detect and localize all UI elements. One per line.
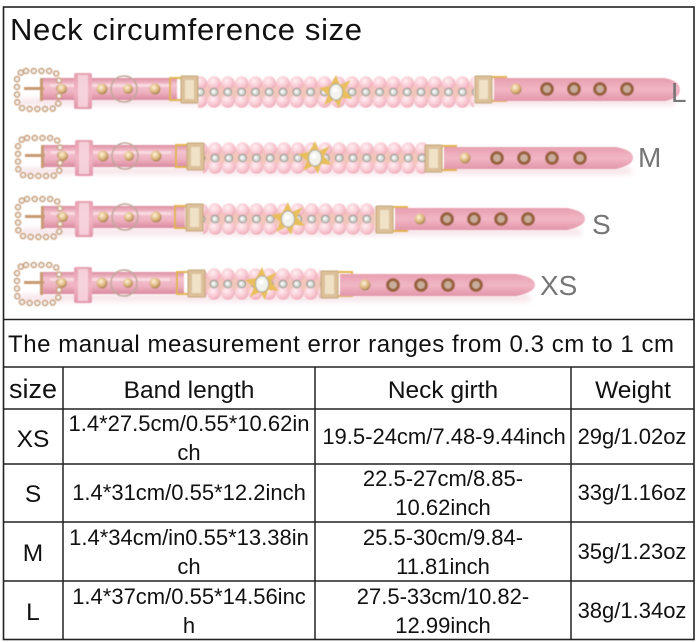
- size label S: S: [592, 209, 611, 240]
- row M: [23, 525, 686, 579]
- row M: ch: [177, 554, 201, 579]
- row M: 25.5-30cm/9.84-: [363, 525, 523, 550]
- row S: 1.4*31cm/0.55*12.2inch: [72, 480, 306, 505]
- row XS: 29g/1.02oz: [578, 424, 686, 449]
- row XS: ch: [177, 440, 201, 465]
- row M: 35g/1.23oz: [578, 539, 686, 564]
- row M: 11.81inch: [396, 554, 490, 579]
- row M: M: [23, 540, 43, 567]
- row S: 10.62inch: [395, 495, 491, 520]
- collar L: [17, 71, 680, 109]
- row S: S: [25, 481, 41, 508]
- row L: 1.4*37cm/0.55*14.56inc: [72, 584, 306, 609]
- collar S: [18, 199, 585, 237]
- header row: Weight: [595, 377, 671, 404]
- table grid: [4, 320, 694, 640]
- size label XS: XS: [540, 270, 577, 301]
- row XS: 1.4*27.5cm/0.55*10.62in: [69, 411, 309, 436]
- row L: 38g/1.34oz: [578, 598, 686, 623]
- collar M: [18, 138, 633, 176]
- row S: 33g/1.16oz: [578, 480, 686, 505]
- row L: 12.99inch: [395, 613, 491, 638]
- row S: 22.5-27cm/8.85-: [363, 466, 523, 491]
- photo: collars by size: [17, 71, 687, 303]
- header row: Neck girth: [388, 377, 498, 404]
- row XS: 19.5-24cm/7.48-9.44inch: [322, 424, 566, 449]
- row S: [25, 466, 686, 520]
- row M: 1.4*34cm/in0.55*13.38in: [69, 525, 309, 550]
- row XS: XS: [17, 426, 49, 453]
- row L: L: [26, 599, 40, 626]
- size label M: M: [638, 142, 661, 173]
- header row: Band length: [124, 377, 254, 404]
- collar XS: [17, 265, 535, 303]
- row L: [26, 584, 686, 638]
- row L: 27.5-33cm/10.82-: [357, 584, 529, 609]
- size table: [4, 320, 694, 640]
- row L: h: [183, 613, 195, 638]
- measurement note: The manual measurement error ranges from 0.3 cm to 1 cm: [8, 331, 674, 358]
- header row: size: [9, 374, 57, 404]
- title: Neck circumference size: [10, 12, 362, 47]
- header row: [9, 374, 671, 404]
- size label L: L: [671, 77, 687, 108]
- row XS: [17, 411, 686, 465]
